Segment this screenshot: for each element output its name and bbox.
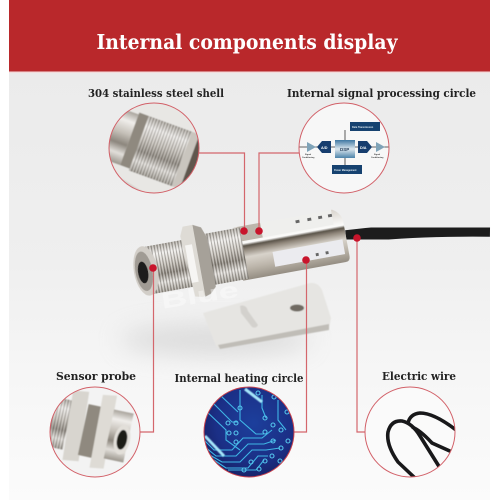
callout: 304 stainless steel shell [88, 88, 224, 194]
label: wire: Electric wire [382, 369, 456, 383]
block diagram: Power Management [334, 169, 357, 172]
sensor cable [346, 230, 490, 237]
coiled wire [388, 413, 456, 478]
block diagram [298, 122, 390, 174]
title: Internal components display [96, 30, 398, 54]
mounting bracket [203, 283, 331, 349]
label: sensor probe: Sensor probe [56, 369, 136, 383]
header band [9, 0, 490, 73]
mounting holes [240, 306, 258, 328]
callout: electric wire [365, 369, 456, 478]
barrel label bottom [273, 239, 345, 267]
metal barrel [234, 208, 350, 281]
block diagram: D/A [360, 146, 367, 150]
block diagram: Conditioning [371, 156, 384, 159]
circuit board traces [204, 389, 290, 472]
block diagram: Signal [305, 154, 311, 156]
front thread [144, 238, 201, 294]
block diagram: Conditioning [302, 156, 315, 159]
front lens cap [130, 244, 162, 298]
block diagram: A/D [321, 146, 328, 150]
watermark: Blue [159, 277, 240, 314]
label: heating: Internal heating circle [174, 371, 304, 385]
hex nuts [179, 223, 217, 299]
barrel label top [260, 210, 334, 237]
soft shadow under sensor [120, 324, 310, 356]
block diagram: Signal [374, 154, 380, 156]
callout: internal heating circle [174, 371, 304, 477]
marker dots [149, 227, 361, 272]
sensor body [127, 198, 352, 308]
callout: sensor probe [50, 372, 140, 478]
probe photo [50, 390, 134, 469]
label: signal: Internal signal processing circle [287, 86, 476, 100]
leader lines [140, 153, 365, 432]
label: shell: 304 stainless steel shell [88, 86, 225, 100]
shell photo [110, 110, 198, 191]
block diagram: DSP [340, 147, 349, 152]
rear thread [202, 227, 249, 285]
block diagram: Data Transmission [352, 126, 374, 129]
callout: internal signal processing circle [287, 86, 476, 193]
